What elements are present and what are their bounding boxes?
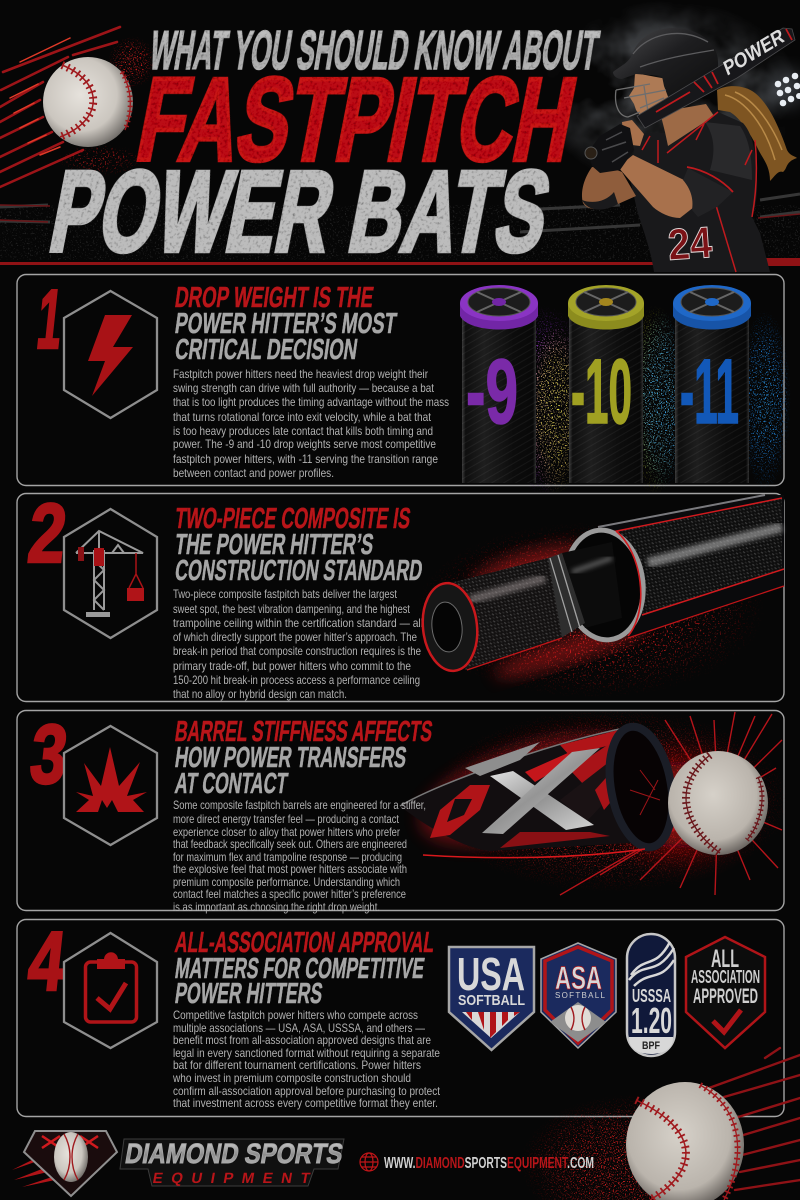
body text: multiple associations — USA, ASA, USSSA, and others — bbox=[173, 1021, 425, 1035]
player bat bbox=[637, 25, 795, 128]
number 2: 2 bbox=[24, 486, 71, 580]
player neck bbox=[660, 104, 714, 146]
body text: who invest in premium composite construction should bbox=[172, 1071, 411, 1085]
body text: contact feel matches a specific power hitter’s preference bbox=[173, 887, 406, 901]
player jersey piping bbox=[642, 112, 756, 272]
bat: drop -9: -9 bbox=[466, 341, 518, 443]
logo streaks bbox=[12, 1150, 55, 1187]
title bbox=[41, 19, 603, 276]
bat brand: POWER bbox=[721, 25, 787, 81]
neck bbox=[562, 542, 622, 628]
heading: ALL-ASSOCIATION APPROVAL bbox=[173, 927, 436, 959]
badge: USSSA 1.20 BPF: 1.20 bbox=[631, 1000, 672, 1041]
logo plate bbox=[120, 1139, 344, 1186]
heading: TWO-PIECE COMPOSITE IS bbox=[173, 503, 412, 535]
badge: all association approved bbox=[686, 937, 765, 1048]
heading: POWER HITTERS bbox=[173, 978, 324, 1010]
player number: 24 bbox=[666, 218, 714, 270]
body text: experience closer to alloy that power hitters who prefer bbox=[173, 825, 400, 839]
badge: USSSA 1.20 BPF: BPF bbox=[642, 1040, 660, 1052]
panel frame bbox=[17, 494, 784, 702]
player hair bbox=[717, 86, 797, 181]
body text: the explosive feel that most power hitters associate with bbox=[173, 862, 407, 876]
panel frame bbox=[17, 710, 784, 910]
heading bbox=[173, 282, 399, 366]
badge: all association approved: ALL bbox=[711, 945, 739, 973]
icon: baseball top bbox=[43, 57, 133, 147]
barrel logo shape bbox=[430, 785, 490, 838]
player forearm bbox=[618, 155, 694, 218]
panel 2: two-piece composite bbox=[17, 486, 784, 702]
barrel opening bbox=[601, 722, 681, 852]
body text: that is too light produces the timing advantage without the mass bbox=[173, 395, 449, 409]
heading: HOW POWER TRANSFERS bbox=[173, 742, 408, 774]
burst and bat illustration bbox=[400, 708, 790, 895]
body text: that investment across every competitive format they enter. bbox=[173, 1096, 438, 1110]
badge: USSSA 1.20 BPF bbox=[627, 934, 675, 1056]
body text: swing strength can drive with full authority — because a bat bbox=[173, 381, 435, 395]
heading: DROP WEIGHT IS THE bbox=[173, 282, 375, 314]
heading bbox=[173, 927, 436, 1010]
logo wordmark: DIAMOND SPORTS bbox=[123, 1137, 346, 1169]
number 1: 1 bbox=[33, 272, 67, 366]
body text: Fastpitch power hitters need the heaviest drop weight their bbox=[173, 367, 428, 381]
body text: that no alloy or hybrid design can match. bbox=[173, 687, 347, 701]
red rule under header bbox=[0, 258, 800, 266]
bat: drop -10 bbox=[568, 285, 644, 483]
paint splatter behind bats bbox=[500, 305, 791, 495]
small barrel bbox=[450, 558, 562, 670]
body text: for maximum flex and trampoline response — producing bbox=[173, 850, 402, 864]
body text: benefit most from all-association approved designs that are bbox=[173, 1033, 431, 1047]
badge: USA Softball: SOFTBALL bbox=[458, 992, 525, 1009]
heading bbox=[173, 503, 424, 587]
badge: USA Softball bbox=[449, 947, 534, 1050]
neck bands bbox=[543, 553, 585, 640]
badge: ASA Softball: SOFTBALL bbox=[555, 991, 606, 1000]
body text bbox=[173, 367, 449, 480]
logo sub-wordmark: EQUIPMENT bbox=[151, 1170, 312, 1187]
badge: ASA Softball bbox=[541, 943, 616, 1048]
player jersey bbox=[628, 112, 770, 272]
body text bbox=[172, 1008, 441, 1110]
body text: primary trade-off, but power hitters who commit to the bbox=[173, 659, 411, 673]
bat: drop -10: -10 bbox=[571, 341, 632, 443]
panel 4: all-association approval bbox=[17, 914, 784, 1116]
icon: crane in hexagon bbox=[64, 509, 157, 638]
body text: Some composite fastpitch barrels are engineered for a stiffer, bbox=[173, 798, 426, 812]
body text: power. The -9 and -10 drop weights serve most competitive bbox=[173, 437, 436, 451]
panel frame bbox=[17, 920, 784, 1116]
swoosh line bbox=[423, 849, 645, 858]
panel 3: barrel stiffness bbox=[17, 707, 790, 914]
body text: between contact and power profiles. bbox=[173, 466, 334, 480]
body text: fastpitch power hitters, with -11 serving the transition range bbox=[173, 452, 438, 466]
heading: BARREL STIFFNESS AFFECTS bbox=[173, 716, 434, 748]
burst rays bbox=[560, 712, 782, 895]
body text: trampoline ceiling within the certification standard — all bbox=[173, 616, 423, 630]
body text: confirm all-association approval before purchasing to protect bbox=[173, 1084, 441, 1098]
collar ring bbox=[559, 526, 649, 644]
large barrel carbon body bbox=[612, 498, 782, 615]
body text bbox=[173, 798, 426, 914]
badge: USA Softball: USA bbox=[457, 948, 525, 1000]
body text: Competitive fastpitch power hitters who compete across bbox=[173, 1008, 418, 1022]
barrel red graphics bbox=[525, 752, 570, 782]
body text: that turns rotational force into exit velocity, while a bat that bbox=[173, 410, 432, 424]
player sleeve bbox=[683, 168, 733, 217]
barrel silver X bbox=[490, 771, 594, 830]
player illustration bbox=[582, 25, 797, 272]
body text: sweet spot, the best vibration dampening, and the highest bbox=[173, 602, 411, 616]
icon: clipboard in hexagon bbox=[64, 933, 157, 1048]
bat: drop -11 bbox=[673, 285, 751, 483]
stadium background bbox=[0, 0, 800, 260]
badge: ASA Softball: ASA bbox=[555, 960, 602, 996]
body text: break-in period that composite construction requires is the bbox=[173, 644, 421, 658]
body text: more direct energy transfer feel — producing a contact bbox=[173, 812, 400, 826]
bat: drop -9 bbox=[460, 285, 538, 483]
composite bat illustration bbox=[415, 495, 784, 698]
heading: CRITICAL DECISION bbox=[173, 334, 359, 366]
barrel end bbox=[419, 580, 481, 674]
panel frame bbox=[17, 274, 784, 486]
website url: WWW.DIAMONDSPORTSEQUIPMENT.COM bbox=[384, 1155, 594, 1172]
heading: POWER HITTER’S MOST bbox=[173, 308, 399, 340]
player near arm bbox=[582, 167, 636, 209]
body text: Two-piece composite fastpitch bats deliver the largest bbox=[173, 587, 398, 601]
body text: that feedback specifically seek out. Others are engineered bbox=[173, 837, 407, 851]
number 3: 3 bbox=[26, 707, 72, 801]
icon: globe bbox=[360, 1153, 378, 1171]
heading: THE POWER HITTER’S bbox=[173, 529, 375, 561]
heading: MATTERS FOR COMPETITIVE bbox=[173, 953, 426, 985]
body text: is as important as choosing the right drop weight. bbox=[173, 900, 380, 914]
panel 1: drop weight bbox=[17, 272, 791, 495]
heading: AT CONTACT bbox=[173, 768, 290, 800]
large barrel sleeve bbox=[598, 495, 784, 638]
body text: is too heavy produces late contact that kills both timing and bbox=[173, 424, 433, 438]
bat barrel bbox=[400, 727, 670, 851]
icon: motion streaks behind baseball bbox=[0, 27, 156, 187]
body text: legal in every sanctioned format without requiring a separate bbox=[173, 1046, 440, 1060]
player fingers bbox=[622, 120, 644, 146]
body text: premium composite performance. Understanding which bbox=[173, 875, 400, 889]
icon: baseball at contact bbox=[668, 751, 768, 855]
footer speed streaks and splatter bbox=[520, 1048, 800, 1200]
icon: large baseball bbox=[626, 1082, 744, 1200]
body text: bat for different tournament certifications. Power hitters bbox=[173, 1058, 421, 1072]
icon: explosion in hexagon bbox=[64, 726, 157, 845]
body text: of which directly support the power hitter’s approach. The bbox=[173, 630, 417, 644]
stadium lights bbox=[767, 68, 800, 108]
body text bbox=[173, 587, 423, 701]
body text: 150-200 hit break-in process access a performance ceiling bbox=[173, 673, 420, 687]
footer logo bbox=[12, 1131, 346, 1196]
player face bbox=[629, 73, 680, 118]
heading bbox=[173, 716, 434, 800]
player face mask bbox=[616, 84, 666, 117]
icon: lightning in hexagon bbox=[64, 291, 157, 418]
player gloves bbox=[585, 124, 634, 173]
title line: fastpitch: FASTPITCH bbox=[128, 54, 586, 186]
logo diamond with baseball bbox=[24, 1131, 117, 1196]
number 4: 4 bbox=[24, 914, 70, 1008]
player helmet bbox=[613, 28, 718, 102]
heading: CONSTRUCTION STANDARD bbox=[173, 555, 424, 587]
badge: USSSA 1.20 BPF: USSSA bbox=[632, 986, 671, 1006]
